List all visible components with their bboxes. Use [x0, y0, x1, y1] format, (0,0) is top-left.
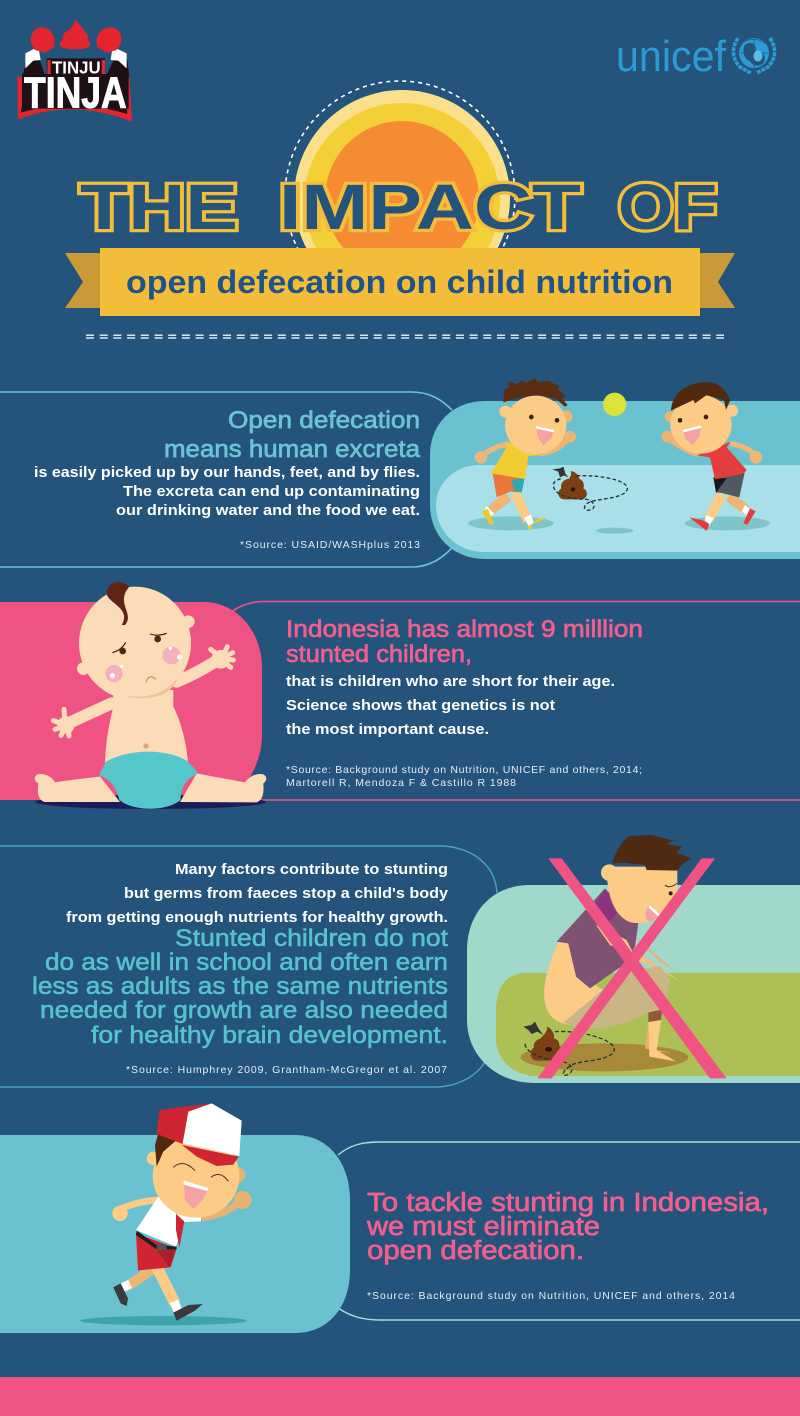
icon: unicef emblem — [733, 38, 775, 73]
illustration panel: playground — [430, 401, 800, 559]
icon: ball — [603, 393, 626, 416]
panel 3: consequences of stunting — [0, 835, 800, 1087]
text: open defecation: our drinking water and the food we eat. — [116, 503, 420, 519]
text: effects of stunting: from getting enough nutrients for healthy growth. — [66, 910, 448, 926]
title: THE — [80, 171, 238, 243]
icon: excreta with fly — [523, 1022, 614, 1075]
text: effects of stunting: Many factors contribute to stunting — [175, 862, 448, 878]
ribbon banner — [65, 248, 735, 316]
text: stunted children: Science shows that genetics is not — [286, 698, 555, 714]
illustration: squatting person crossed out — [520, 835, 727, 1078]
text: effects of stunting: Stunted children do not — [175, 925, 448, 952]
illustration panel: teal — [0, 1135, 350, 1333]
subtitle: open defecation on child nutrition — [126, 264, 673, 300]
text: stunted children: Martorell R, Mendoza F & Castillo R 1988 — [286, 777, 516, 789]
text: open defecation: The excreta can end up contaminating — [123, 484, 420, 500]
text: tackle stunting: open defecation. — [367, 1237, 584, 1265]
illustration: children playing — [468, 378, 770, 534]
illustration: schoolboy — [80, 1103, 252, 1325]
icon: excreta with fly — [552, 467, 627, 510]
text: effects of stunting — [32, 862, 448, 1076]
text: tackle stunting: *Source: Background study on Nutrition, UNICEF and others, 2014 — [367, 1290, 735, 1302]
text: open defecation — [34, 407, 420, 551]
text: stunted children: stunted children, — [286, 641, 472, 668]
text: open defecation: Open defecation — [228, 407, 420, 434]
text: stunted children: *Source: Background study on Nutrition, UNICEF and others, 2014; — [286, 764, 642, 776]
child in yellow — [475, 378, 576, 531]
panel 4: call to action — [0, 1103, 800, 1333]
illustration panel: field — [467, 885, 800, 1083]
text: tackle stunting — [366, 1189, 769, 1302]
title: IMPACT — [279, 171, 581, 243]
logo word: TINJA: TINJA — [24, 68, 127, 117]
title — [80, 171, 717, 243]
logo word: TINJU: TINJU — [52, 57, 101, 77]
icon: prohibited cross — [537, 858, 727, 1078]
text: stunted children — [286, 616, 643, 789]
illustration: crying baby — [35, 582, 266, 809]
text: open defecation: is easily picked up by our hands, feet, and by flies. — [34, 465, 420, 481]
text: effects of stunting: for healthy brain development. — [91, 1022, 448, 1049]
sun — [285, 80, 516, 248]
illustration panel: pink — [0, 602, 262, 800]
text: open defecation: means human excreta — [164, 436, 420, 463]
text: stunted children: Indonesia has almost 9 milllion — [286, 616, 643, 643]
panel 1: open defecation — [0, 378, 800, 567]
text: effects of stunting: needed for growth are also needed — [40, 997, 448, 1024]
text: effects of stunting: *Source: Humphrey 2009, Grantham-McGregor et al. 2007 — [126, 1064, 447, 1076]
logo: Tinju Tinja — [17, 18, 132, 122]
text: effects of stunting: less as adults as the same nutrients — [32, 973, 448, 1000]
child in red — [661, 382, 762, 531]
text: tackle stunting: To tackle stunting in Indonesia, — [367, 1189, 769, 1217]
title: OF — [618, 171, 717, 243]
logo: unicef: unicef — [616, 32, 727, 81]
text: tackle stunting: we must eliminate — [366, 1213, 600, 1241]
panel 2: stunted children — [0, 582, 800, 809]
footer bar — [0, 1377, 800, 1416]
text: effects of stunting: but germs from faeces stop a child's body — [124, 886, 448, 902]
text: open defecation: *Source: USAID/WASHplus 2013 — [240, 539, 420, 551]
text: stunted children: the most important cause. — [286, 722, 489, 738]
text: stunted children: that is children who are short for their age. — [286, 674, 615, 690]
text: effects of stunting: do as well in school and often earn — [45, 949, 448, 976]
